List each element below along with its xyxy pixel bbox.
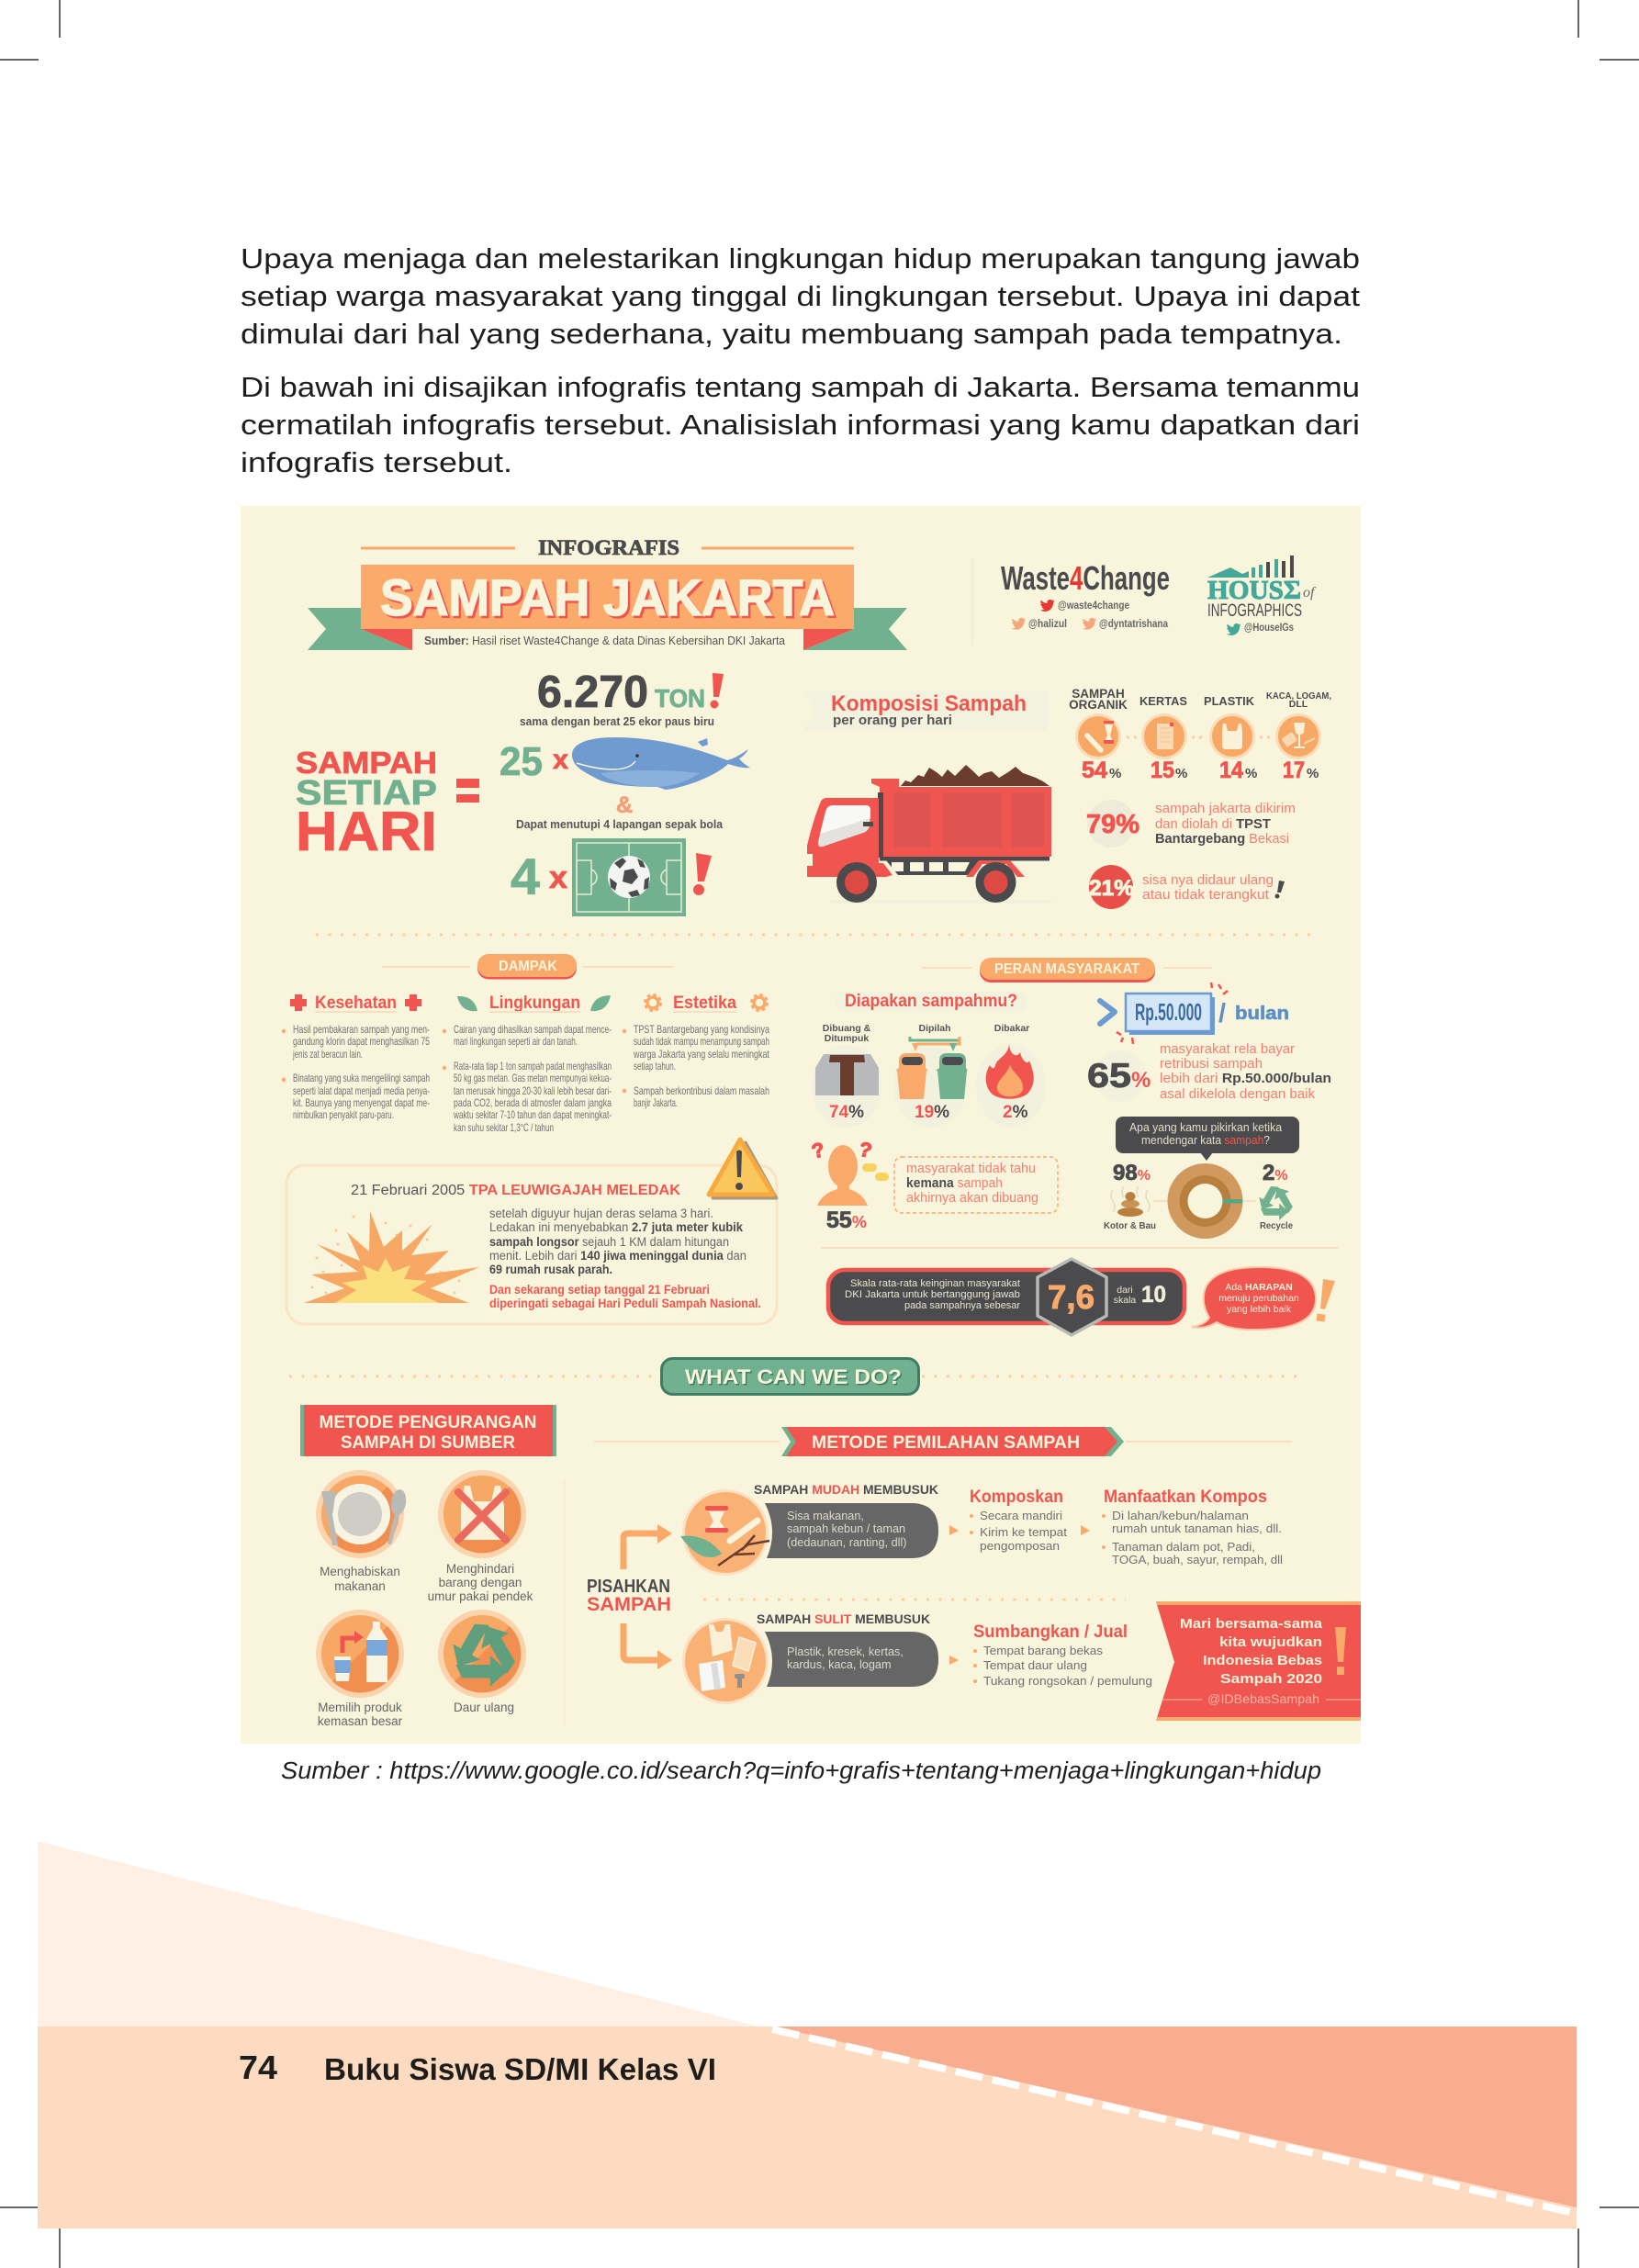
ampersand: &: [616, 792, 633, 818]
group: sampah mudah membusuk: [680, 1483, 1283, 1576]
icon: dump pile: [815, 1054, 879, 1095]
speech bubble: harapan: Ada HARAPAN: [1225, 1282, 1293, 1293]
group: sampah mudah membusuk: pengomposan: [980, 1539, 1060, 1553]
chart: diapakan sampahmu: Dibakar: [994, 1023, 1029, 1034]
flow: pisahkan sampah: PISAHKAN: [587, 1577, 670, 1597]
score bar: skala 7,6 dari 10: dari: [1117, 1285, 1133, 1296]
stat: 65 percent retribution: /: [1218, 999, 1226, 1028]
section heading: peran masyarakat: PERAN MASYARAKAT: [994, 961, 1139, 977]
group: sampah sulit membusuk: Sumbangkan / Jual: [973, 1622, 1128, 1642]
column: kesehatan: nimbulkan penyakit paru-paru.: [293, 1108, 394, 1121]
composition labels and percentages: 54: [1082, 758, 1107, 783]
panel: TPA Leuwigajah explosion story: menit. Lebih dari 140 jiwa meninggal dunia dan: [489, 1249, 747, 1263]
column: kesehatan: jenis zat beracun lain.: [292, 1048, 363, 1061]
logos and credits: @dyntatrishana: [1099, 617, 1168, 630]
headline: sampah setiap hari: SAMPAH: [296, 746, 437, 780]
group: sampah mudah membusuk: (dedaunan, ranting, dll): [787, 1536, 907, 1549]
composition labels and percentages: PLASTIK: [1204, 694, 1255, 708]
group: sampah sulit membusuk: kardus, kaca, logam: [787, 1658, 892, 1671]
title banner: SAMPAH JAKARTA: [382, 571, 837, 628]
group: sampah sulit membusuk: [682, 1612, 1152, 1704]
score bar: skala 7,6 dari 10: pada sampahnya sebesar: [904, 1300, 1020, 1311]
panel: metode pengurangan: METODE PENGURANGAN: [320, 1413, 536, 1432]
column: estetika: [623, 994, 769, 1109]
composition labels and percentages: %: [1245, 766, 1257, 781]
stat: 55 percent confused person: [810, 1138, 1058, 1233]
stat: 6.270 ton: sama dengan berat 25 ekor paus biru: [520, 715, 714, 728]
composition labels and percentages: 15: [1151, 758, 1174, 783]
whale comparison: 25: [500, 739, 543, 784]
composition labels and percentages: [1069, 687, 1331, 783]
column: kesehatan: [282, 994, 430, 1121]
icon: football field: [572, 838, 686, 916]
section heading: what can we do: WHAT CAN WE DO?: [685, 1365, 902, 1388]
headline: sampah setiap hari: [296, 746, 479, 862]
panel: TPA Leuwigajah explosion story: 69 rumah rusak parah.: [489, 1263, 612, 1276]
column: lingkungan: tan merusak hingga 20-30 kali lebih besar dari-: [454, 1084, 612, 1097]
column: lingkungan: Rata-rata tiap 1 ton sampah padat menghasilkan: [454, 1060, 612, 1072]
column: lingkungan: [443, 994, 612, 1134]
icon: recycle: [1254, 1181, 1298, 1220]
column: kesehatan: Hasil pembakaran sampah yang men-: [293, 1023, 430, 1036]
column: lingkungan: Lingkungan: [489, 994, 580, 1013]
icon: warning triangle: [709, 1140, 777, 1198]
callout: indonesia bebas sampah 2020: kita wujudkan: [1219, 1635, 1322, 1650]
section heading: peran masyarakat: [922, 958, 1212, 982]
logos and credits: Waste4Change: [1001, 559, 1170, 597]
group: sampah mudah membusuk: Secara mandiri: [980, 1509, 1062, 1522]
intro paragraph 1: [241, 242, 1360, 350]
icon: glass and metal: [1275, 713, 1321, 759]
icon: crossed plastic bag: [438, 1470, 526, 1558]
panel: metode pengurangan: kemasan besar: [318, 1714, 403, 1728]
chart: diapakan sampahmu: [812, 992, 1046, 1128]
stat: 55 percent confused person: 55%: [826, 1207, 867, 1233]
score bar: skala 7,6 dari 10: 10: [1141, 1282, 1166, 1308]
football field comparison: [511, 818, 724, 916]
stat: 55 percent confused person: masyarakat tidak tahu: [906, 1162, 1036, 1176]
column: lingkungan: Cairan yang dihasilkan sampah dapat mence-: [454, 1023, 612, 1036]
logos and credits: of: [1303, 585, 1317, 601]
title banner: SAMPAH JAKARTA: [380, 568, 835, 626]
column: lingkungan: mari lingkungan seperti air dan tanah.: [454, 1035, 578, 1048]
column: estetika: TPST Bantargebang yang kondisinya: [634, 1023, 769, 1036]
komposisi sampah banner: [803, 691, 1048, 731]
group: sampah sulit membusuk: Tempat daur ulang: [983, 1658, 1087, 1672]
intro paragraph 2: infografis tersebut.: [241, 446, 512, 478]
whale comparison: x: [553, 745, 568, 775]
stat: 65 percent retribution: retribusi sampah: [1160, 1056, 1263, 1072]
stat: 79 percent: sampah jakarta dikirim: [1155, 801, 1296, 816]
intro paragraph 1: Upaya menjaga dan melestarikan lingkungan hidup merupakan tangung jawab: [241, 242, 1360, 275]
score bar: skala 7,6 dari 10: 7,6: [1048, 1278, 1095, 1316]
poll: apa yang kamu pikirkan: 2%: [1263, 1161, 1288, 1185]
flow: pisahkan sampah: SAMPAH: [587, 1594, 671, 1615]
column: estetika: sudah tidak mampu menampung sampah: [634, 1035, 769, 1048]
stat: 65 percent retribution: bulan: [1235, 1004, 1289, 1024]
panel: metode pengurangan: umur pakai pendek: [428, 1589, 533, 1603]
chart: diapakan sampahmu: 2%: [1003, 1103, 1028, 1122]
chart: diapakan sampahmu: 74%: [829, 1103, 864, 1122]
poll: apa yang kamu pikirkan: 98%: [1113, 1161, 1151, 1185]
column: lingkungan: waktu sekitar 7-10 tahun dan dapat meningkat-: [453, 1108, 612, 1121]
football field comparison: Dapat menutupi 4 lapangan sepak bola: [516, 818, 724, 831]
title banner: Sumber: Hasil riset Waste4Change & data Dinas Kebersihan DKI Jakarta: [424, 634, 785, 647]
speech bubble: harapan: menuju perubahan: [1218, 1293, 1299, 1304]
section heading: what can we do: WHAT CAN WE DO?: [687, 1366, 904, 1390]
panel: metode pengurangan: SAMPAH DI SUMBER: [341, 1433, 515, 1453]
intro paragraph 1: dimulai dari hal yang sederhana, yaitu membuang sampah pada tempatnya.: [241, 318, 1342, 350]
stat: 65 percent retribution: %: [1131, 1068, 1151, 1093]
group: sampah mudah membusuk: Manfaatkan Kompos: [1104, 1488, 1267, 1507]
intro paragraph 2: [241, 371, 1360, 478]
stat: 79 percent: [1086, 800, 1296, 848]
icon: thinking person: [810, 1138, 889, 1206]
icon: explosion: [304, 1211, 479, 1303]
group: sampah sulit membusuk: Plastik, kresek, kertas,: [787, 1645, 904, 1658]
stat: 65 percent retribution: 65: [1087, 1057, 1131, 1095]
logos and credits: @halizul: [1028, 617, 1067, 630]
section banner: metode pemilahan: METODE PEMILAHAN SAMPAH: [812, 1433, 1080, 1453]
icon: thinking person: ?: [857, 1138, 874, 1162]
panel: metode pengurangan: Menghindari: [446, 1562, 514, 1576]
poll: apa yang kamu pikirkan: mendengar kata sampah?: [1141, 1134, 1270, 1147]
composition labels and percentages: 17: [1283, 758, 1305, 783]
headline: sampah setiap hari: SETIAP: [296, 774, 437, 813]
chart: diapakan sampahmu: Dibuang &: [823, 1023, 871, 1034]
panel: metode pengurangan: Daur ulang: [454, 1701, 514, 1714]
chart: diapakan sampahmu: Dipilah: [918, 1023, 951, 1034]
callout: indonesia bebas sampah 2020: Indonesia Bebas: [1203, 1654, 1322, 1668]
garbage truck illustration: [807, 765, 1051, 904]
stat: 21 percent: sisa nya didaur ulang: [1142, 872, 1274, 888]
chart: diapakan sampahmu: Ditumpuk: [825, 1033, 869, 1044]
column: estetika: setiap tahun.: [634, 1060, 676, 1072]
composition labels and percentages: %: [1175, 766, 1187, 781]
icon: paper: [1141, 713, 1187, 759]
chart: donut: [1153, 1163, 1256, 1239]
column: lingkungan: 50 kg gas metan. Gas metan mempunyai kekua-: [454, 1072, 612, 1084]
icon: fire: [986, 1044, 1034, 1099]
group: sampah sulit membusuk: Tempat barang bekas: [983, 1644, 1104, 1657]
column: estetika: Sampah berkontribusi dalam masalah: [634, 1084, 769, 1097]
stat: 65 percent retribution: masyarakat rela bayar: [1160, 1041, 1295, 1057]
speech bubble: harapan: yang lebih baik: [1227, 1304, 1292, 1315]
stat: 6.270 ton: [520, 668, 724, 728]
intro paragraph 2: cermatilah infografis tersebut. Analisislah informasi yang kamu dapatkan dari: [241, 409, 1360, 441]
panel: TPA Leuwigajah explosion story: 21 Februari 2005 TPA LEUWIGAJAH MELEDAK: [351, 1183, 681, 1198]
column: kesehatan: Kesehatan: [315, 994, 397, 1013]
football field comparison: x: [549, 860, 567, 895]
stat: 21 percent: atau tidak terangkut: [1142, 887, 1270, 903]
group: sampah mudah membusuk: Di lahan/kebun/halaman: [1112, 1509, 1249, 1522]
composition labels and percentages: ORGANIK: [1069, 698, 1128, 712]
icon: inorganic waste circle: [682, 1618, 769, 1704]
score bar: skala 7,6 dari 10: DKI Jakarta untuk bertanggung jawab: [845, 1289, 1020, 1300]
group: sampah mudah membusuk: Sisa makanan,: [787, 1510, 864, 1522]
score bar: skala 7,6 dari 10: Skala rata-rata keinginan masyarakat: [850, 1278, 1020, 1289]
logos and credits: INFOGRAPHICS: [1207, 601, 1302, 621]
stat: 6.270 ton: 6.270: [537, 668, 648, 717]
stat: 65 percent retribution: lebih dari Rp.50.000/bulan: [1160, 1071, 1331, 1086]
column: estetika: Estetika: [673, 994, 736, 1013]
column: estetika: banjir Jakarta.: [634, 1096, 678, 1109]
score bar: skala 7,6 dari 10: [828, 1259, 1184, 1335]
panel: TPA Leuwigajah explosion story: setelah diguyur hujan deras selama 3 hari.: [489, 1207, 713, 1220]
score bar: skala 7,6 dari 10: skala: [1114, 1295, 1136, 1306]
football field comparison: 4: [511, 848, 540, 905]
section banner: metode pemilahan: [594, 1427, 1292, 1456]
panel: TPA Leuwigajah explosion story: Ledakan ini menyebabkan 2.7 juta meter kubik: [489, 1220, 743, 1234]
icon: smelly pile: [1111, 1186, 1150, 1217]
stat: 6.270 ton: TON: [655, 684, 705, 713]
icon: recycling: [438, 1610, 526, 1698]
intro paragraph 2: Di bawah ini disajikan infografis tentang sampah di Jakarta. Bersama temanmu: [241, 371, 1360, 403]
section heading: what can we do: [661, 1359, 918, 1394]
panel: metode pengurangan: [300, 1405, 556, 1728]
stat: 79 percent: dan diolah di TPST: [1155, 816, 1271, 832]
section heading: dampak: [382, 954, 673, 979]
icon: organic waste: [1075, 713, 1121, 759]
poll: apa yang kamu pikirkan: Kotor & Bau: [1104, 1220, 1156, 1231]
icon: sorting bins: [895, 1037, 968, 1099]
whale comparison: [500, 737, 750, 790]
stat: 79 percent: Bantargebang Bekasi: [1155, 831, 1289, 847]
column: kesehatan: seperti lalat dapat menjadi media penya-: [293, 1084, 430, 1097]
poll: apa yang kamu pikirkan: Apa yang kamu pikirkan ketika: [1129, 1121, 1282, 1134]
column: estetika: warga Jakarta yang selalu meningkat: [633, 1048, 769, 1061]
panel: TPA Leuwigajah explosion story: [286, 1140, 777, 1324]
panel: TPA Leuwigajah explosion story: sampah longsor sejauh 1 KM dalam hitungan: [489, 1235, 729, 1249]
komposisi sampah banner: Komposisi Sampah: [831, 691, 1027, 716]
headline: sampah setiap hari: HARI: [296, 801, 437, 862]
composition labels and percentages: DLL: [1289, 699, 1308, 710]
icon: thinking person: ?: [810, 1138, 826, 1162]
column: lingkungan: kan suhu sekitar 1,3°C / tahun: [454, 1121, 554, 1134]
composition labels and percentages: %: [1109, 766, 1121, 781]
panel: metode pengurangan: Memilih produk: [318, 1701, 402, 1714]
logos and credits: [972, 556, 1317, 646]
icon: organic waste circle: [680, 1489, 769, 1576]
stat: 79 percent: 79%: [1086, 810, 1139, 839]
callout: indonesia bebas sampah 2020: Mari bersama-sama: [1180, 1617, 1323, 1632]
panel: TPA Leuwigajah explosion story: Dan sekarang setiap tanggal 21 Februari: [489, 1283, 710, 1297]
infographic panel: background: [241, 506, 1361, 1744]
group: sampah mudah membusuk: Komposkan: [970, 1488, 1063, 1507]
panel: metode pengurangan: Menghabiskan: [320, 1565, 400, 1578]
composition labels and percentages: %: [1307, 766, 1319, 781]
logos and credits: HOUSΣ: [1207, 576, 1301, 605]
composition labels and percentages: SAMPAH: [1072, 687, 1125, 701]
icon: bigger packaging: [316, 1610, 404, 1698]
chart: diapakan sampahmu: 19%: [915, 1103, 949, 1122]
speech bubble: harapan: [1192, 1267, 1335, 1330]
callout: indonesia bebas sampah 2020: @IDBebasSampah: [1207, 1691, 1319, 1706]
logos and credits: @HouseIGs: [1244, 621, 1294, 634]
poll: apa yang kamu pikirkan: Recycle: [1260, 1220, 1293, 1231]
stat: 21 percent: [1089, 865, 1285, 909]
group: sampah mudah membusuk: Kirim ke tempat: [980, 1525, 1067, 1539]
title banner: [308, 536, 907, 650]
composition labels and percentages: 14: [1219, 758, 1243, 783]
footer band: [38, 1841, 1577, 2229]
flow: pisahkan sampah: [587, 1524, 672, 1669]
logos and credits: @waste4change: [1058, 599, 1129, 612]
group: sampah mudah membusuk: Tanaman dalam pot, Padi,: [1112, 1540, 1255, 1554]
composition labels and percentages: KACA, LOGAM,: [1266, 691, 1331, 702]
group: sampah mudah membusuk: SAMPAH MUDAH MEMBUSUK: [754, 1483, 938, 1497]
group: sampah mudah membusuk: rumah untuk tanaman hias, dll.: [1112, 1521, 1282, 1535]
group: sampah sulit membusuk: Tukang rongsokan / pemulung: [983, 1674, 1152, 1688]
stat: 65 percent retribution: [1087, 982, 1331, 1102]
section heading: dampak: DAMPAK: [499, 959, 558, 974]
stat: 55 percent confused person: kemana sampah: [906, 1176, 1003, 1191]
icon: blue whale: [572, 737, 750, 790]
column: kesehatan: Binatang yang suka mengelilingi sampah: [293, 1072, 430, 1084]
intro paragraph 1: setiap warga masyarakat yang tinggal di lingkungan tersebut. Upaya ini dapat: [241, 280, 1360, 312]
group: sampah mudah membusuk: sampah kebun / taman: [787, 1522, 905, 1535]
panel: metode pengurangan: makanan: [334, 1579, 386, 1593]
stat: 65 percent retribution: asal dikelola dengan baik: [1160, 1086, 1315, 1102]
title banner: INFOGRAFIS: [538, 536, 679, 560]
column: lingkungan: pada CO2, berada di atmosfer dalam jangka: [454, 1096, 612, 1109]
page number: 74: [239, 2049, 277, 2086]
callout: indonesia bebas sampah 2020: [1156, 1601, 1361, 1721]
chart: diapakan sampahmu: Diapakan sampahmu?: [845, 992, 1017, 1011]
group: sampah mudah membusuk: TOGA, buah, sayur, rempah, dll: [1112, 1553, 1283, 1566]
group: sampah sulit membusuk: SAMPAH SULIT MEMBUSUK: [757, 1612, 930, 1626]
panel: metode pengurangan: barang dengan: [439, 1576, 522, 1589]
column: kesehatan: kit. Baunya yang menyengat dapat me-: [293, 1096, 430, 1109]
callout: indonesia bebas sampah 2020: Sampah 2020: [1220, 1672, 1322, 1687]
icon: plate: [316, 1470, 408, 1558]
column: kesehatan: gandung klorin dapat menghasilkan 75: [293, 1035, 430, 1048]
icon: plastic bag: [1209, 713, 1255, 759]
stat: 55 percent confused person: akhirnya akan dibuang: [906, 1191, 1038, 1206]
composition labels and percentages: KERTAS: [1139, 694, 1187, 708]
komposisi sampah banner: per orang per hari: [833, 713, 952, 728]
stat: 65 percent retribution: Rp.50.000: [1135, 998, 1202, 1026]
source caption: Sumber : https://www.google.co.id/search?q=info+grafis+tentang+menjaga+lingkungan+hidup: [281, 1758, 1321, 1784]
stat: 21 percent: 21%: [1089, 876, 1134, 901]
poll: apa yang kamu pikirkan: [1104, 1117, 1299, 1239]
panel: TPA Leuwigajah explosion story: diperingati sebagai Hari Peduli Sampah Nasional.: [489, 1297, 761, 1310]
book title: Buku Siswa SD/MI Kelas VI: [324, 2052, 716, 2086]
